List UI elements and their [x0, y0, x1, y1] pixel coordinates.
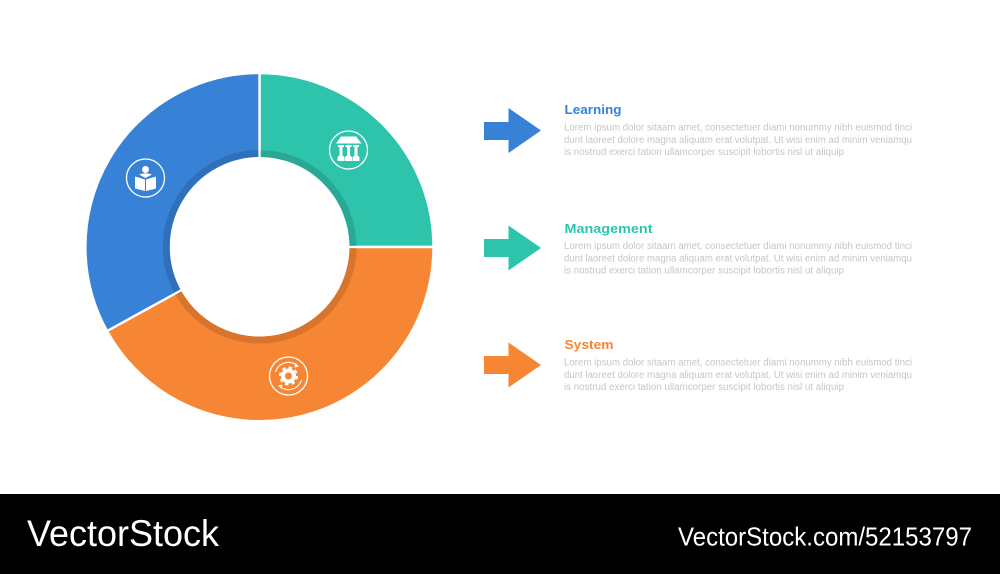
- arrow: learning: [484, 108, 541, 153]
- body: learning: is nostrud exerci tation ullamcorper suscipit lobortis nisl ut aliquip: [564, 147, 844, 158]
- footer bar: [0, 494, 1000, 574]
- body: management: Lorem ipsum dolor sitaam amet, consectetuer diami nonummy nibh euismod tinci: [564, 241, 912, 252]
- footer logo text: VectorStock: [27, 513, 219, 554]
- arrow: management: [484, 226, 541, 270]
- inner shadow: blue: [166, 154, 258, 291]
- body: management: is nostrud exerci tation ullamcorper suscipit lobortis nisl ut aliquip: [564, 266, 844, 276]
- inner shadow: teal: [261, 154, 353, 246]
- heading: management: Management: [564, 221, 653, 236]
- icon: pillars building: [330, 131, 368, 169]
- body: learning: Lorem ipsum dolor sitaam amet, consectetuer diami nonummy nibh euismod tinci: [564, 122, 912, 134]
- body: system: dunt laoreet dolore magna aliquam erat volutpat. Ut wisi enim ad minim veniamqu: [564, 370, 912, 381]
- body: system: Lorem ipsum dolor sitaam amet, consectetuer diami nonummy nibh euismod tinci: [564, 358, 912, 368]
- body: learning: dunt laoreet dolore magna aliquam erat volutpat. Ut wisi enim ad minim veniamqu: [564, 135, 912, 146]
- segment: learning (blue): [85, 73, 259, 331]
- segment: management (teal): [260, 73, 434, 247]
- icon: gear with cycle arrows: [270, 357, 308, 395]
- segment: system (orange): [107, 247, 434, 421]
- inner shadow: orange: [178, 248, 353, 340]
- body: system: is nostrud exerci tation ullamcorper suscipit lobortis nisl ut aliquip: [564, 382, 844, 393]
- body: system: [564, 358, 912, 393]
- text block: management: [564, 221, 912, 276]
- text block: system: [564, 337, 912, 393]
- heading: learning: Learning: [564, 102, 622, 117]
- icon: reader with book: [126, 159, 164, 197]
- footer url text: VectorStock.com/52153797: [678, 522, 972, 552]
- body: management: dunt laoreet dolore magna aliquam erat volutpat. Ut wisi enim ad minim veniamqu: [564, 254, 912, 264]
- center hole: [170, 158, 349, 336]
- heading: system: System: [564, 337, 614, 352]
- text block: learning: [564, 102, 912, 158]
- body: learning: [564, 122, 912, 158]
- arrow: system: [484, 342, 541, 388]
- donut chart: [85, 73, 434, 421]
- body: management: [564, 241, 912, 276]
